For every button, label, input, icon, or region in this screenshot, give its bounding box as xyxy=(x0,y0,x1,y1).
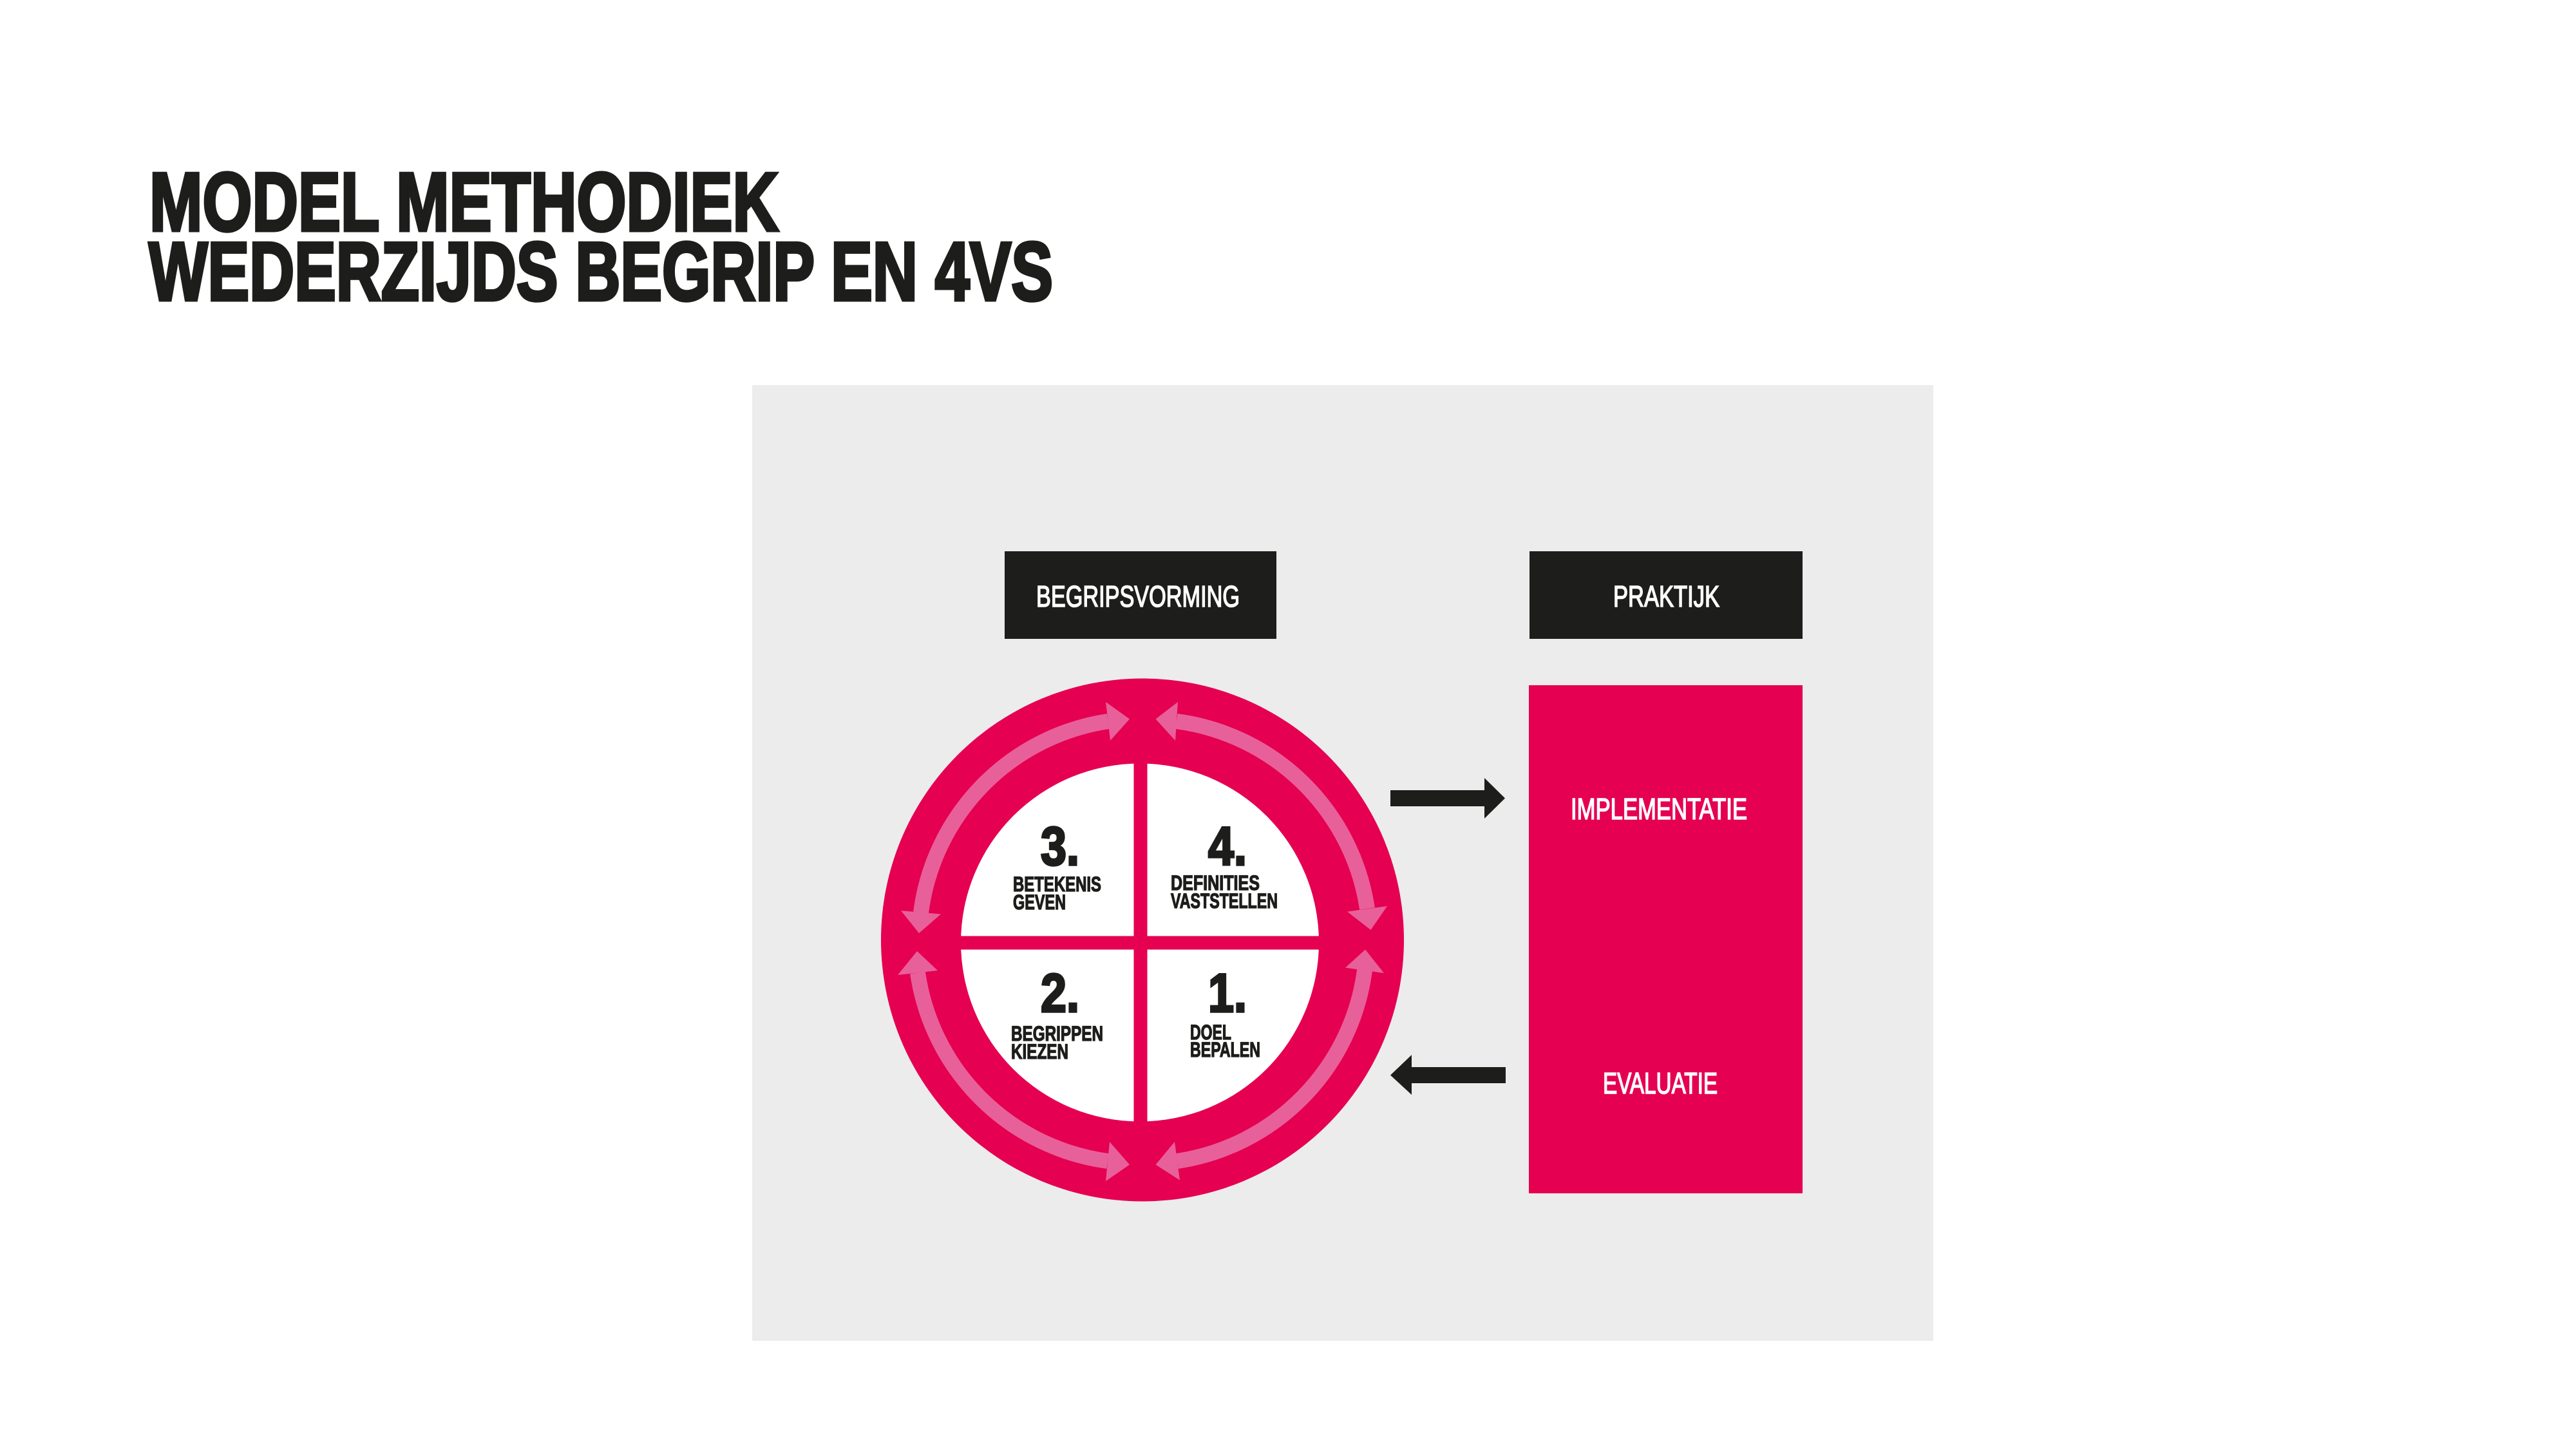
arrow: top-left double-headed arc xyxy=(901,702,1130,933)
label: evaluatie: EVALUATIE xyxy=(1603,1066,1718,1100)
step 3: betekenis geven xyxy=(1013,816,1101,914)
step 2: begrippen kiezen: BEGRIPPEN xyxy=(1011,1022,1103,1045)
heading: begripsvorming: BEGRIPSVORMING xyxy=(1036,580,1240,613)
arrow: bottom-left double-headed arc xyxy=(898,951,1130,1181)
step 3: betekenis geven: 3. xyxy=(1041,816,1079,876)
arrow: to implementatie xyxy=(1390,778,1505,819)
step 1: doel bepalen: DOEL xyxy=(1190,1021,1231,1044)
arrow: bottom-right double-headed arc xyxy=(1155,949,1384,1180)
panel: praktijk block xyxy=(1529,685,1803,1193)
panel: diagram background xyxy=(752,385,1933,1341)
label: implementatie: IMPLEMENTATIE xyxy=(1571,792,1747,826)
step 1: doel bepalen xyxy=(1190,963,1260,1061)
step 1: doel bepalen: BEPALEN xyxy=(1190,1038,1260,1061)
heading: begripsvorming xyxy=(1005,551,1276,639)
title xyxy=(149,156,1053,318)
step 2: begrippen kiezen xyxy=(1011,963,1103,1063)
arrow: from evaluatie xyxy=(1390,1055,1506,1095)
step 3: betekenis geven: BETEKENIS xyxy=(1013,873,1101,896)
step 4: definities vaststellen xyxy=(1171,816,1278,913)
quadrants: white inner circle xyxy=(954,757,1326,1128)
step 4: definities vaststellen: 4. xyxy=(1208,816,1247,876)
step 2: begrippen kiezen: KIEZEN xyxy=(1011,1040,1068,1063)
arrow: top-right double-headed arc xyxy=(1155,702,1387,930)
step 1: doel bepalen: 1. xyxy=(1208,963,1247,1023)
step 4: definities vaststellen: VASTSTELLEN xyxy=(1171,889,1278,913)
step 4: definities vaststellen: DEFINITIES xyxy=(1171,871,1260,895)
panel: cycle circle xyxy=(881,679,1404,1202)
heading: praktijk: PRAKTIJK xyxy=(1613,580,1719,613)
step 3: betekenis geven: GEVEN xyxy=(1013,891,1066,914)
step 2: begrippen kiezen: 2. xyxy=(1041,963,1079,1023)
title: MODEL METHODIEK xyxy=(149,156,779,249)
title: WEDERZIJDS BEGRIP EN 4VS xyxy=(149,225,1053,318)
heading: praktijk xyxy=(1530,551,1803,639)
